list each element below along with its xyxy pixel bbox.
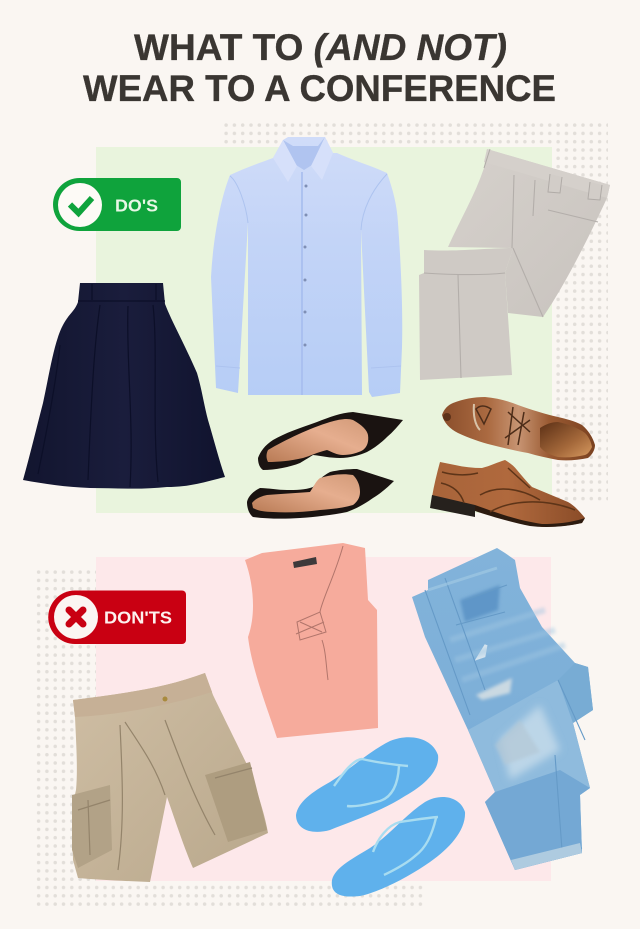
item: blue flip-flops — [296, 737, 465, 897]
title: WHAT TO (AND NOT) — [134, 27, 507, 68]
title: WEAR TO A CONFERENCE — [83, 68, 556, 109]
item: blue dress shirt — [211, 137, 402, 397]
badge: do's: DO'S — [115, 196, 158, 216]
badge: do's — [53, 178, 181, 231]
title — [83, 27, 556, 109]
item: pink lace-up top — [245, 543, 378, 738]
panel: do's background with dots — [96, 121, 608, 513]
panel: don'ts background with dots — [34, 557, 551, 907]
item: black heels — [247, 412, 403, 519]
item: navy skirt — [23, 283, 225, 489]
icon: x mark — [69, 610, 83, 624]
icon: check mark — [70, 198, 92, 213]
badge: don'ts: DON'TS — [104, 608, 172, 628]
item: khaki cargo shorts — [72, 673, 268, 882]
item: beige trousers — [419, 149, 610, 380]
badge: don'ts — [48, 590, 186, 644]
item: brown brogues — [430, 397, 595, 527]
item: distressed blue jeans — [412, 548, 593, 870]
